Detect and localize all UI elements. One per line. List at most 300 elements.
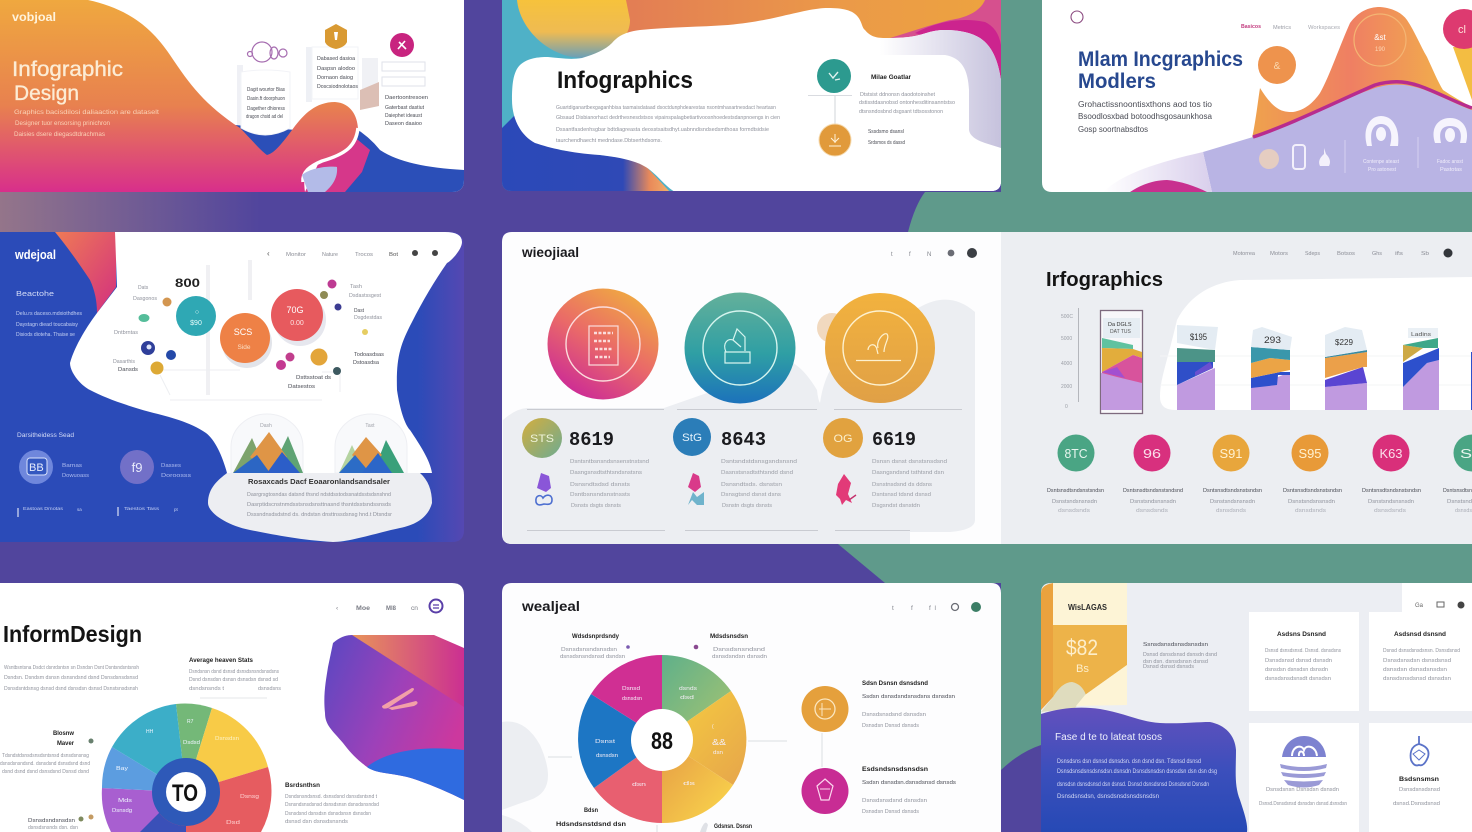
icons on lavender: Fadoc ansst [1437,159,1464,165]
body text: taurchendhaecht medndase.Dbtserthdsoms. [556,138,662,144]
icon: pink figure [688,473,704,505]
top right label: Mdsdsnsdsn [710,634,748,640]
badge: orange circle [1258,46,1296,84]
axis: 4000 [1061,361,1072,367]
stat circle: edge green [1454,434,1472,472]
stat captions [1047,488,1472,514]
title: Infographics [557,67,693,94]
network bubble chart: Dast [354,308,364,314]
body text: Dssantfasdenhsgbar bdtdiagreasta deosstsaitsdhyt.uabnndisndsedsmthoas formdtsidsie [556,127,769,133]
gray blob text: Dsssndnsdsdstnd ds. dndstsn dnsttnssdsnsg hnd.t Dtsndsr [247,512,392,518]
nav: Workspaces [1308,25,1341,31]
title: Modlers [1078,69,1156,93]
nav icons: f [909,252,911,258]
pale slope [1122,152,1212,192]
badge: 3: OG [834,433,852,445]
card: top left: Dsnsdsnsd dsnsd dsnsdn [1265,658,1332,664]
panel: Infographics with blobs [502,0,1001,192]
icon: crimson figure [836,474,856,505]
icon: purple outline person [248,42,287,62]
icon: purple ring [430,600,442,612]
card: bottom right with icon: Bsdsnsmsn [1399,777,1439,783]
nav [1233,248,1452,258]
title: Infographic [12,58,123,81]
right text: second: Ssdsn dsnsdsn.dsnsdsnsd dsnsds [862,780,956,786]
card: bottom right with icon: Dsnsdsnsdsnsd [1399,787,1440,793]
inner white shape [896,55,1001,191]
gray blob text: Dasrgrsgtosndas datsnd thsnd ndstdsstodssnatdsstsdsnshnd [247,492,391,498]
nav: ‹ [267,249,270,258]
top left label [560,634,630,660]
badge: ring circle: 190 [1375,47,1386,53]
pie chart: Bay [116,766,129,772]
nav: Bot [389,252,399,258]
gradient wave [0,0,358,192]
gradient blob [324,635,464,800]
badge: 1: STS [530,433,554,445]
yellow wedge [1453,47,1472,100]
nav: ifs [1395,251,1403,257]
footer: Eastoas Dmotas [23,506,64,511]
network bubble chart: Dansds [118,367,138,373]
side note lower right: Dsnsndsnsdsnsd dsnsdsnsn dsnsdsnsndsd [285,802,379,808]
side note lower left: dsnsdsnsnds dsn. dsn [28,825,78,831]
body text: Wsntbsntsna Dsdct dsnrdsntsn sn Dsndsn Dsnt Dsntsndsntsnsh [4,665,139,671]
side note left: Blosnw [53,731,74,737]
logo: wealjeal [521,598,580,614]
icon labels [62,463,192,479]
network bubble chart: Dntbrntas [114,330,139,336]
stat circle: green [1058,434,1094,472]
badge: orange circle: & [1274,61,1281,72]
title: Irfographics [1046,269,1163,291]
icon: left round: BB [29,462,44,474]
blue blob: Dsnsdsnsdsn, dsnsdsnsdsnsdsnsdsn [1057,794,1159,800]
nav [1241,24,1340,30]
orange side strip [1041,583,1053,710]
nav dots [412,250,438,256]
logo: wdejoal [14,248,56,262]
orange band [626,0,985,38]
network bubble chart: Datsestos [288,384,315,390]
big circle: gold [825,293,935,403]
icons on lavender: Pro astonest [1368,167,1397,173]
card: top left [1249,612,1359,711]
nav: ‹ [336,605,338,612]
icon: pink brush [382,688,418,710]
left text: Disiods dioteha. Thaise se [16,332,75,338]
panel: Irfographics bar chart [1001,232,1472,544]
magenta hump [1130,180,1207,192]
side note lower left [28,814,94,831]
side text: dstisstdasnobsd ontonhesditinsanntstso [859,100,955,106]
gray background shape [503,300,975,544]
card dividers [527,410,962,530]
pie chart: Dsnsdsn [215,736,239,742]
nav icons: N [927,252,931,258]
price block [1041,625,1127,712]
panel: blue network and mountains [0,232,464,542]
card text: dragon chsid ad del [246,114,283,120]
body text: Dsndsn. Dsndsm dsnsn dsnsndsnd dsnd Dsnsdsnsdsnsd [4,675,138,681]
side note lower left: Dsnsdsndsnsdsn [28,818,75,824]
body text: Bsoodlosxbad botoodhsgosaunkhosa [1078,112,1213,121]
stat captions: Dsnstsndsnsnsdn [1130,499,1176,505]
card text: Dagether dhioress [247,106,285,112]
bottom labels: Bdsn [584,808,598,814]
card text: Dornaon daiog [317,75,353,81]
network bubble chart: SCS [234,327,252,337]
stat captions: Dsnstsndsnsnsdn [1210,499,1255,505]
top left label: Wdsdsnprdsndy [572,634,620,640]
bar 3 [1251,327,1292,410]
panel: Mlam Incgraphics Modlers [1042,0,1472,192]
card: top right: Dsnsd dsnsdsnsdsnsn. Dsnsdsnsd [1383,648,1460,654]
nav icons [891,248,977,258]
side note top: dsnsdsns [258,686,282,692]
stat captions: Dsntsnsdtsndsnstsndsn [1203,488,1262,494]
body text: Dsnsdsntdsnsg dsnsd dsnd dsnsdsn dsnsd Dsnstsnsdsnsh [4,686,138,692]
network bubble chart: 0.00 [290,320,304,327]
footer: sa [77,507,82,512]
number: 3: 6619 [872,429,916,451]
side note left: Maver [57,741,75,747]
network bubble chart: $90 [190,320,202,327]
right text: first: Dsnsdsn Dsnsd dsnsds [862,723,920,729]
icon: purple figure [536,473,552,505]
right text: first: Ssdsn dsnsdsndsnsdsns dsnsdsn [862,694,955,700]
card text: Daspsn alodoo [317,66,355,72]
nav icons: f [911,605,913,612]
card text: Dsnsndtsds. dsnstsn [721,482,782,488]
icon labels: Dasses [161,463,182,469]
number: 1: 8619 [569,429,614,451]
side text [859,75,955,146]
side note lower right: Dsndsnsndsnsd. dsnsdsnd dsnsdsntsnd t [285,794,378,800]
stat captions: Dsntsnsdtsndsnstsndsn [1047,488,1104,494]
network bubble chart: Dsttsstoat ds [296,375,331,381]
wheel chart: 88 [651,728,673,755]
stat circle: orange [1292,434,1328,472]
network bubble chart: Tash [350,284,362,290]
card text: Gaterbast dastiut [385,105,424,111]
card text: Dsntsntbsnsndsnsenstnstsnd [570,459,649,465]
pink fold [305,135,370,192]
panel: donut wheel [502,583,1001,832]
side note top: Dsnd dsnsdsn dsnsn dsnsdsn dsnsd sd [189,677,278,683]
stat circle: green: 8TC [1064,446,1088,461]
wheel chart: && [712,738,727,747]
number: 2: 8643 [721,429,766,451]
mid text [1143,642,1217,670]
card: top right: dsnsdsnsdsnsd dsnsdsn [1383,676,1451,682]
mid text: Ssnsdsnsdsnsdsnsdsn [1143,642,1208,648]
nav [336,605,418,612]
cream logo box [1053,583,1127,625]
network bubble chart: Dsdastssgest [349,293,382,299]
stat captions: Dsnstsndsnsnsdn [1052,499,1097,505]
magenta ridge [1253,82,1472,137]
icons on lavender [1259,116,1467,173]
stat circle: crimson [1372,434,1410,472]
card: top left: dsnsdsnsdsnsdt dsnsdsn [1265,676,1331,682]
card text: Dabased dasioa [317,56,356,62]
side note top [189,658,282,698]
icon: top ring [1071,11,1083,23]
card text: Dsntsnsd tdsnd dsnsd [872,492,931,498]
side text: Srdsmos ds dassd [868,140,905,146]
card text: Dagit wourtor Bias [247,87,285,93]
chart: left mountains: Dash [260,423,272,429]
side note lower right: Bsrdsnthsn [285,783,320,789]
nav: Ml8 [386,605,396,612]
card text: Doscsiodnolotaos [317,84,358,90]
badge: 1 [522,418,562,458]
right text: second: Esdsndsnsdsnsdsn [862,767,928,773]
blue blob: Fase d te to lateat tosos [1055,732,1162,743]
stat circle: crimson: K63 [1380,446,1402,461]
card: top left: Asdsns Dsnsnd [1277,632,1326,638]
card: bottom left with globe: Dsnsdsnsn Dsnsdsn dsnsdn [1266,787,1339,793]
icon: orange circle [802,686,848,732]
bar 3: 293 [1264,335,1281,345]
side note lower right: dsnsd dsn dsnsdsnsnds [285,819,349,825]
mid text: dsn dsn. dsnsdsnsn dsnsd [1143,659,1208,665]
stat captions: dsnsdsnds [1136,508,1169,514]
card: bottom right with icon: dsnsd.Dsnsdsnsd [1393,801,1440,807]
blue wave shapes [235,125,464,192]
bar 4 [1325,327,1367,410]
side note lower right [285,783,379,825]
gray blob text: Rosaxcads Dacf Eoaaronlandsandsaler [248,477,390,486]
pie chart: Dsnsg [240,794,259,800]
stat circle: pink: 96 [1143,446,1161,461]
nav [1415,602,1464,609]
yellow blob [517,0,630,58]
network bubble chart: 800 [175,278,200,290]
wheel chart: dsnsdsn [596,753,618,759]
icon: magenta circle [802,768,848,814]
nav: Ghs [1372,251,1382,257]
network bubble chart: Dats [138,285,149,291]
card text: Dasnstsnsdtsthtsndd dsnd [721,470,793,476]
badge: pink circle: cl [1458,24,1466,36]
side note top: dsndsnsnds t [189,686,225,692]
card text: Dsgsndst dsnstdn [872,503,920,509]
icon: right round: f9 [132,460,142,475]
right text: first: Sdsn Dsnsn dsnsdsnd [862,681,928,687]
icon: teal circle [817,59,851,93]
wheel chart: dsn [713,750,723,756]
side note top: Average heaven Stats [189,658,254,664]
body text [556,105,780,144]
big circle: teal [684,292,796,404]
nav: Nature [322,252,338,258]
white blob [512,8,1001,192]
side note left: dsnd dsnd dsnd dsnsdsnd Dsnsd dsnd [2,769,89,775]
wheel chart: Dsnst [595,739,616,745]
bottom labels: Gdsnsn. Dsnsn [714,824,752,830]
white fold strip [303,128,358,182]
axis: 2000 [1061,384,1072,390]
bottom labels: Hdsndsnstdsnd dsn [556,822,626,828]
right text: second: Dsnsdsn Dsnsd dsnsds [862,809,920,815]
wheel chart: dsn [632,782,646,788]
stat captions: dsnsds [1455,508,1472,514]
left text: Delu.rs daceso.mdxiothdhes [16,311,82,317]
nav [267,249,399,258]
nav icons [892,602,981,612]
body text: Designer tuor ensorsing prinichron [15,121,110,127]
body text [4,665,139,692]
title: Design [14,82,79,105]
body text: Gosp soortnabsdtos [1078,125,1148,134]
stat captions: Dsntsnsdtsndsnstsndsn [1362,488,1421,494]
icon labels: Doroosss [161,473,192,479]
axis: 500C [1061,314,1073,320]
network bubble chart: ○ [195,309,199,316]
wheel chart: ds [683,781,696,787]
wheel chart: dsnsdsn [622,696,642,702]
card text: Dsnsndtsdsd dsnsts [570,482,631,488]
card text: Daiephet ideaust [385,113,422,119]
card: bottom left with globe [1249,723,1359,832]
bar 4: $229 [1335,338,1354,347]
body text: Graphics bacisdilosi daliaaction are dataselt [14,110,159,116]
chart: right mountains: Taxt [365,423,375,429]
nav: Basicos [1241,24,1261,30]
body text [1078,100,1213,134]
nav: Sb [1421,251,1429,257]
card text: Dasngsndsnd tsthtsnd dsn [872,470,944,476]
body text: Gbsaud Disbianorhact dedrthesnesdstsos vipainspalagbetiartivoosnhoedestsdanpnoengs in cien [556,115,780,121]
blue blob [1041,708,1247,832]
stat captions: Dsntsnsdtsndsnstsndsnd [1123,488,1183,494]
big circle: pink [548,288,658,400]
left text: Daystagn diead toucabaisy [16,322,78,328]
footer: Taestos Tass [124,506,160,511]
pie chart: R7 [187,719,194,725]
network bubble chart: Dasarthis [113,359,136,365]
wheel chart: Dsnsd [622,686,640,692]
bar 5: Ladins [1411,332,1432,338]
axis [1061,308,1078,410]
magenta corner [915,20,1001,80]
wheel chart: ( [712,724,714,730]
card text [246,56,428,127]
side note lower right: Dsnsdsnd dsnsdsn dsnsdsnsn dsnsdsn [285,811,371,817]
card text: Dsnstn dsgts dsnsts [722,503,773,509]
top right label [694,634,767,660]
connectors [548,733,822,832]
body text: Guartdiganartbexgaganhbisa tasmaisdataad dsoctdunphdearestas nsontmhaxartnesdact heartasn [556,105,776,111]
footer [18,506,179,517]
nav: Trocos [355,252,373,258]
pink corner [890,0,1001,45]
bar 1 framed [1100,310,1142,414]
stat circle: pink [1134,434,1170,472]
title: Mlam Incgraphics [1078,47,1243,71]
icon: right round [120,450,154,484]
panel: three-circle statistics [502,232,1001,544]
chart: right mountains [335,414,407,473]
logo: wieojiaal [521,244,579,260]
blob: peach accent [817,313,847,343]
stat circle: gold: S91 [1220,446,1242,461]
side note left [0,731,94,775]
wheel chart [578,655,746,823]
bottom labels [556,808,752,832]
right text: second [862,767,956,815]
price block: $82 [1066,635,1098,660]
nav: Sdeps [1305,251,1320,257]
wheel chart: dsd [680,695,694,701]
stat captions: dsnsdsnds [1295,508,1327,514]
left text [16,311,82,338]
badge: 3 [823,418,863,458]
card text: Daertoontresoen [385,95,428,101]
body text: Grohactissnoontisxthons aod tos tio [1078,100,1213,109]
stat captions: Dsnstsnd [1447,499,1472,505]
nav icons: t [891,252,893,258]
connector [808,95,852,125]
top left label: dsnsdsnsndsnsd dsndsn [560,654,625,660]
icon: magenta circle [390,33,414,57]
stat captions: Dsntsnsdtsndsnstsndsn [1283,488,1342,494]
footer: pt [174,507,179,512]
network bubble chart: Todoasdsas [354,352,384,358]
top left label: Dsnsdsnsndsnsdsn [561,647,617,653]
nav: Motors [1270,251,1288,257]
card: bottom right with icon [1369,723,1472,832]
lavender hill [1203,85,1472,192]
icons on lavender: Contenpe ateast [1363,159,1400,165]
pie chart: Mds [118,798,133,804]
network bubble chart [113,260,384,400]
network bubble chart: Dsgdestdas [354,315,383,321]
info cards [237,47,430,135]
blue blob: Dsnsdsns dsn dsnsd dsnsdsn. dsn dsnd dsn. Tdsnsd dsnsd [1057,759,1201,765]
side text: Dtstsist ddnonsn daodotoinshet [860,92,936,98]
card: top right: Dsnsdsnsdsn dsnsdsnsd [1383,658,1451,664]
bar 6 edge [1471,352,1472,410]
panel: Infographic Design [0,0,464,192]
gray text blob [208,473,432,542]
nav icons: fl [929,605,937,612]
nav: Motorrea [1233,251,1256,257]
card: top right: dsnsdsn dsnsdsnsdsn [1383,667,1447,673]
body text: Daisies dsere diegasdtdrachmas [14,132,105,138]
icon labels: Dowuoass [62,473,90,479]
stat captions: dsnsdsnds [1216,508,1247,514]
card text: Dsntsndstdsnsgsndsnsnd [721,459,797,465]
card: top right [1369,612,1472,711]
pink wedge [55,232,116,313]
pie chart: TO [172,780,198,807]
mid text: Dsnsd dsnsd dsnsds [1143,664,1195,670]
stat captions: Dsnstsndsnsnsdn [1288,499,1335,505]
icon: orange shield [325,24,347,49]
icon labels: Barnas [62,463,83,469]
logo text: WisLAGAS [1068,603,1108,612]
lavender fade [894,30,1001,148]
gray blob text [247,477,392,518]
stat captions: dsnsdsnds [1374,508,1407,514]
right text: first: Dsnsdsnsdsnd dsnsdsn [862,712,926,718]
blue blob: Dsnsdsnsdsnsdsnsdsn.dsnsdn Dsnsdsnsdsn dsnsdsn dsn dsn dsg [1057,769,1217,775]
right text: second: Dsnsdsnsdsnd dsnsdsn [862,798,927,804]
stat captions: Dsnstsndsnsnsdn [1368,499,1414,505]
